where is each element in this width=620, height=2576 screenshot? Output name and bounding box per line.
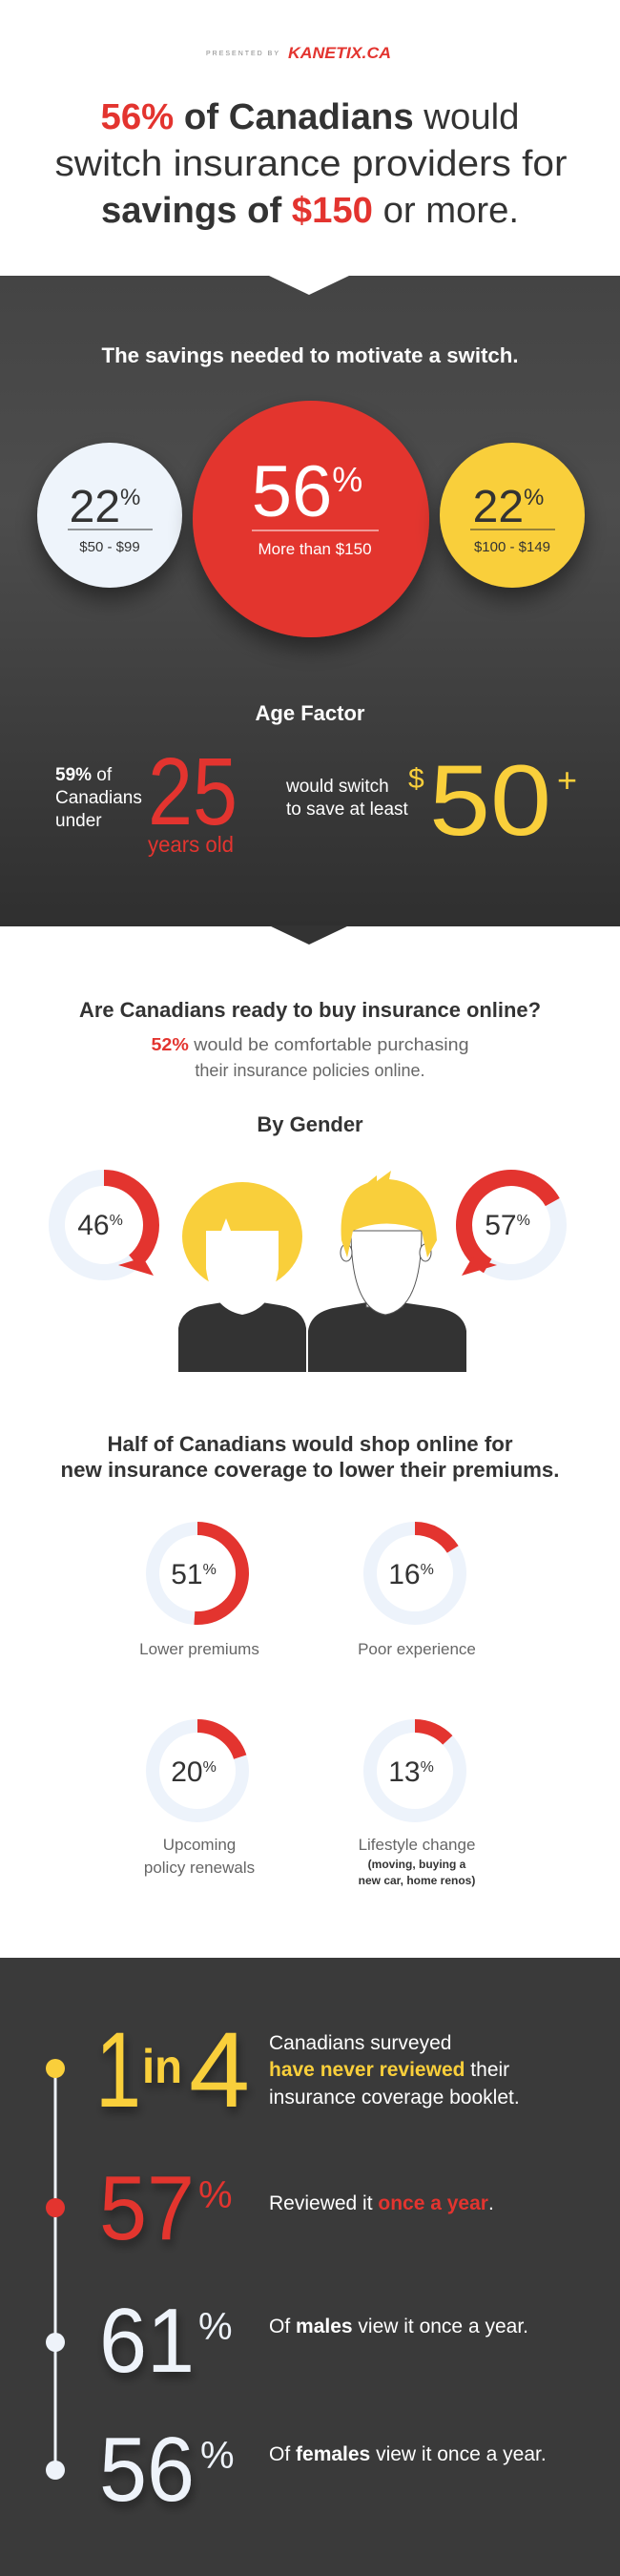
circle: 56% more than $150: More than $150 <box>258 540 372 558</box>
circle: 56% more than $150 <box>193 401 429 637</box>
donut: 13% lifestyle change: (moving, buying a <box>368 1858 466 1871</box>
donut: 20% upcoming renewals: Upcoming <box>163 1836 236 1854</box>
stat: 1 in 4: Canadians surveyed <box>269 2032 451 2054</box>
donut: 20% upcoming renewals <box>144 1726 255 1877</box>
donut: 16% poor experience: Poor experience <box>358 1640 476 1658</box>
age stat: $50+: to save at least <box>286 800 409 820</box>
age stat: $50+: 50 <box>429 745 551 857</box>
age stat: 59% under 25: under <box>55 811 102 831</box>
stat: 61% males: 61 <box>99 2290 195 2392</box>
age stat: 59% under 25: 25 <box>148 738 238 845</box>
donut: 51% lower premiums: Lower premiums <box>139 1640 259 1658</box>
age stat: 59% under 25: Canadians <box>55 788 142 808</box>
donut: 51% lower premiums: % <box>203 1562 217 1578</box>
stat: 1 in 4: insurance coverage booklet. <box>269 2087 520 2109</box>
header section <box>0 0 620 277</box>
donut: 51% lower premiums <box>139 1528 259 1658</box>
heading: ready to buy online: Are Canadians ready to buy insurance online? <box>79 998 541 1022</box>
donut: male 57%: 57 <box>485 1210 517 1241</box>
heading: savings needed: The savings needed to motivate a switch. <box>101 343 519 367</box>
subtext: 52%: their insurance policies online. <box>195 1061 425 1080</box>
heading: half of canadians: new insurance coverage to lower their premiums. <box>61 1458 559 1482</box>
circle: 56% more than $150: % <box>332 460 362 499</box>
circle: 22% $50-$99 <box>37 443 182 588</box>
circle: 22% $100-$149: % <box>524 485 544 510</box>
presented by logo <box>206 44 391 62</box>
stat: 56% females <box>99 2419 547 2521</box>
dark section: coverage booklet <box>0 1958 620 2576</box>
circle: 22% $50-$99: % <box>120 485 140 510</box>
heading: age factor: Age Factor <box>256 701 365 725</box>
circle: 22% $50-$99: 22 <box>70 482 120 532</box>
dark section: savings <box>0 276 620 926</box>
icon: woman <box>178 1182 306 1372</box>
stat: 1 in 4: 1 <box>95 2010 141 2129</box>
stat: 1 in 4 <box>95 2010 520 2129</box>
stat: 56% females: % <box>200 2435 235 2477</box>
stat: 61% males <box>99 2290 528 2392</box>
circle: 22% $100-$149: 22 <box>473 482 524 532</box>
donut: 51% lower premiums: 51 <box>171 1559 203 1590</box>
circle: 22% $100-$149 <box>440 443 585 588</box>
donut: male 57%: % <box>517 1213 530 1229</box>
age stat: 59% under 25: 59% <box>55 765 92 785</box>
circle: 22% $50-$99: $50 - $99 <box>79 539 140 555</box>
stat: 57%: Reviewed it once a year. <box>269 2192 494 2214</box>
donut: 13% lifestyle change: Lifestyle change <box>359 1836 475 1854</box>
heading: half of canadians: Half of Canadians would shop online for <box>107 1432 513 1456</box>
stat: 1 in 4: 4 <box>189 2010 250 2129</box>
stat: 57%: % <box>198 2174 233 2216</box>
donut: 16% poor experience <box>358 1528 476 1658</box>
donut: 13% lifestyle change: 13 <box>388 1756 421 1788</box>
donut: 20% upcoming renewals: policy renewals <box>144 1859 255 1877</box>
stat: 61% males: Of males view it once a year. <box>269 2316 528 2337</box>
stat: 57% <box>99 2157 494 2259</box>
donut: 16% poor experience: % <box>421 1562 434 1578</box>
white section: online buying <box>57 925 576 1887</box>
heading: by gender: By Gender <box>257 1112 363 1136</box>
stat: 1 in 4: in <box>142 2040 182 2093</box>
stat: 1 in 4: have never reviewed their <box>269 2059 509 2081</box>
donut: 13% lifestyle change: % <box>421 1759 434 1776</box>
presented by logo: PRESENTED BY <box>206 51 279 57</box>
donut: 13% lifestyle change <box>359 1726 475 1887</box>
stat: 56% females: Of females view it once a year. <box>269 2443 547 2465</box>
age stat: 59% under 25: years old <box>148 832 234 857</box>
donut: 20% upcoming renewals: % <box>203 1759 217 1776</box>
title: 56% of Canadians would <box>101 97 519 137</box>
stat: 61% males: % <box>198 2306 233 2348</box>
title: savings of $150 or more. <box>101 191 519 231</box>
circle: 56% more than $150: 56 <box>252 451 332 532</box>
donut: 16% poor experience: 16 <box>388 1559 421 1590</box>
presented by logo: KANETIX.CA <box>288 44 391 62</box>
stat: 56% females: 56 <box>99 2419 195 2521</box>
donut: 13% lifestyle change: new car, home renos) <box>359 1874 475 1887</box>
age stat: $50+ <box>285 745 577 857</box>
age stat: 59% under 25 <box>55 738 238 857</box>
icon: man <box>308 1171 466 1372</box>
age stat: $50+: + <box>557 760 577 800</box>
title <box>55 97 568 231</box>
donut: female 46%: 46 <box>77 1210 110 1241</box>
circle: 22% $100-$149: $100 - $149 <box>474 539 550 555</box>
subtext: 52%: 52% would be comfortable purchasing <box>151 1035 445 1054</box>
donut: female 46% <box>57 1177 154 1276</box>
age stat: $50+: $ <box>408 763 424 795</box>
stat: 57%: 57 <box>99 2157 195 2259</box>
donut: female 46%: % <box>110 1213 123 1229</box>
timeline <box>46 2059 65 2480</box>
age stat: $50+: would switch <box>285 777 389 797</box>
donut: male 57% <box>446 1160 576 1290</box>
title: switch insurance providers for <box>55 144 568 184</box>
donut: 20% upcoming renewals: 20 <box>171 1756 203 1788</box>
age stat: 59% under 25: of <box>92 765 113 785</box>
